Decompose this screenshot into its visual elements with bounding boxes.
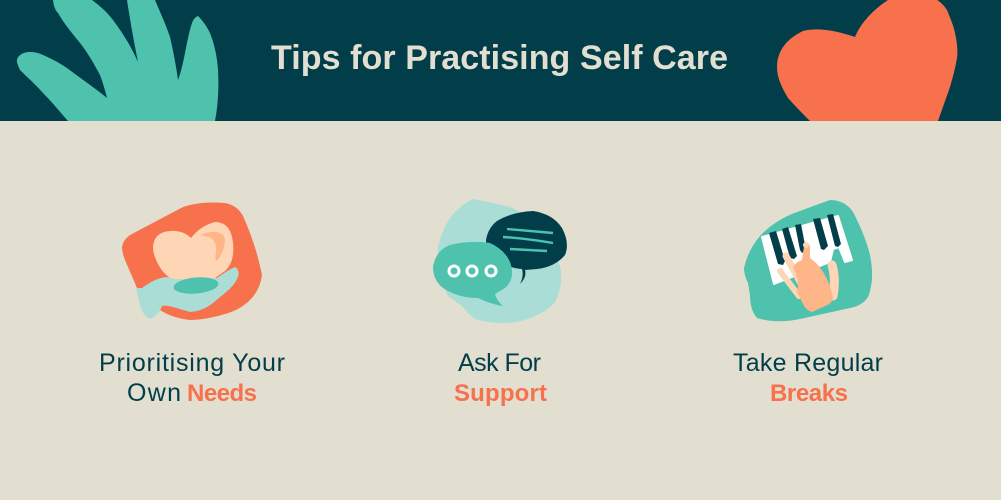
- label: ask for support: Ask For: [458, 349, 541, 377]
- label: prioritising your own needs: [99, 349, 285, 407]
- label: ask for support: Support: [454, 380, 547, 407]
- icon: hand on piano: [744, 200, 872, 321]
- label: prioritising your own needs: Prioritising Your: [99, 349, 285, 377]
- label: take regular breaks: [733, 349, 883, 407]
- label: prioritising your own needs: Own: [127, 379, 181, 407]
- icon: speech bubbles: [433, 199, 567, 323]
- label: take regular breaks: Breaks: [770, 380, 848, 407]
- header band: [0, 0, 1001, 121]
- label: prioritising your own needs: Needs: [187, 380, 257, 407]
- title: Tips for Practising Self Care: [271, 39, 728, 77]
- label: ask for support: [454, 349, 547, 407]
- label: take regular breaks: Take Regular: [733, 349, 883, 377]
- icon: heart in hand: [122, 202, 262, 320]
- icon: leaf: [17, 0, 218, 121]
- icon: heart: [777, 0, 957, 121]
